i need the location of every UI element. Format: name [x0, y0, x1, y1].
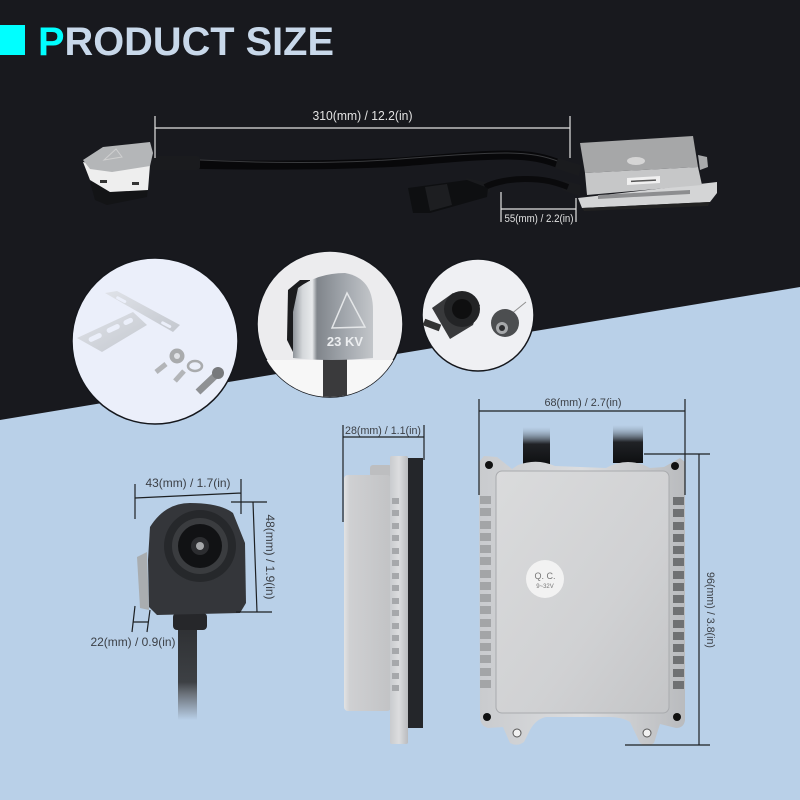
panel: ballast side view — [343, 425, 424, 744]
cable — [178, 625, 197, 720]
connector plug — [408, 180, 488, 213]
strain reliefs — [150, 156, 581, 199]
dimension: height 96 mm — [625, 454, 716, 745]
dimension: height 48 mm: 48(mm) / 1.9(in) — [263, 514, 277, 600]
mounting holes — [483, 461, 681, 737]
socket wire — [323, 358, 347, 398]
connector body — [148, 503, 246, 615]
cooling fins — [480, 496, 684, 689]
dimension: width 68 mm: 68(mm) / 2.7(in) — [544, 397, 622, 409]
dimension: depth 22 mm — [90, 606, 176, 649]
dimension: branch 55 mm — [501, 192, 576, 225]
flange — [390, 456, 408, 744]
lens socket — [164, 510, 236, 582]
panel: full assembly — [83, 109, 717, 225]
socket — [424, 291, 480, 339]
silver side — [137, 552, 149, 610]
dimension: height 96 mm: 96(mm) / 3.8(in) — [704, 572, 716, 648]
dimension: height 48 mm — [231, 502, 277, 612]
housing — [479, 456, 685, 746]
dimension: width 43 mm: 43(mm) / 1.7(in) — [146, 476, 230, 490]
fins — [392, 498, 399, 691]
branch cable — [485, 179, 568, 187]
dimension: length 310 mm: 310(mm) / 12.2(in) — [312, 109, 412, 123]
panel: ballast front view — [479, 397, 716, 746]
title: PRODUCT SIZE — [38, 20, 334, 64]
main cable — [153, 153, 562, 165]
panel: mounting hardware circle — [72, 258, 238, 424]
body — [344, 475, 391, 711]
dimension: depth 22 mm: 22(mm) / 0.9(in) — [90, 635, 176, 649]
black gasket — [408, 458, 423, 728]
warning triangle — [332, 293, 365, 328]
icon: bracket — [77, 291, 180, 352]
dimension: width 43 mm — [135, 476, 241, 519]
panel: socket close-up circle — [257, 251, 403, 400]
input wires — [523, 425, 643, 465]
QC sticker: 9~32V — [536, 584, 554, 590]
dimension: thickness 28 mm: 28(mm) / 1.1(in) — [345, 425, 421, 437]
bulb — [491, 302, 526, 337]
dimension: branch 55 mm: 55(mm) / 2.2(in) — [504, 213, 574, 225]
QC sticker: Q. C. — [534, 571, 556, 581]
socket back — [287, 280, 310, 358]
icon: screws and nuts — [156, 348, 224, 392]
mounting bump — [370, 465, 392, 477]
panel: socket and bulb circle — [422, 259, 534, 371]
dimension: thickness 28 mm — [343, 425, 424, 522]
dimension: width 68 mm — [479, 397, 685, 495]
panel: connector front view — [90, 476, 277, 720]
QC sticker — [526, 560, 564, 598]
bulb socket — [83, 142, 153, 205]
ballast module — [578, 136, 717, 211]
socket metal cap — [293, 273, 373, 360]
cap rating: 23 KV — [327, 334, 363, 349]
top plate — [496, 471, 669, 713]
dimension: length 310 mm — [155, 109, 570, 158]
cable neck — [173, 613, 207, 630]
